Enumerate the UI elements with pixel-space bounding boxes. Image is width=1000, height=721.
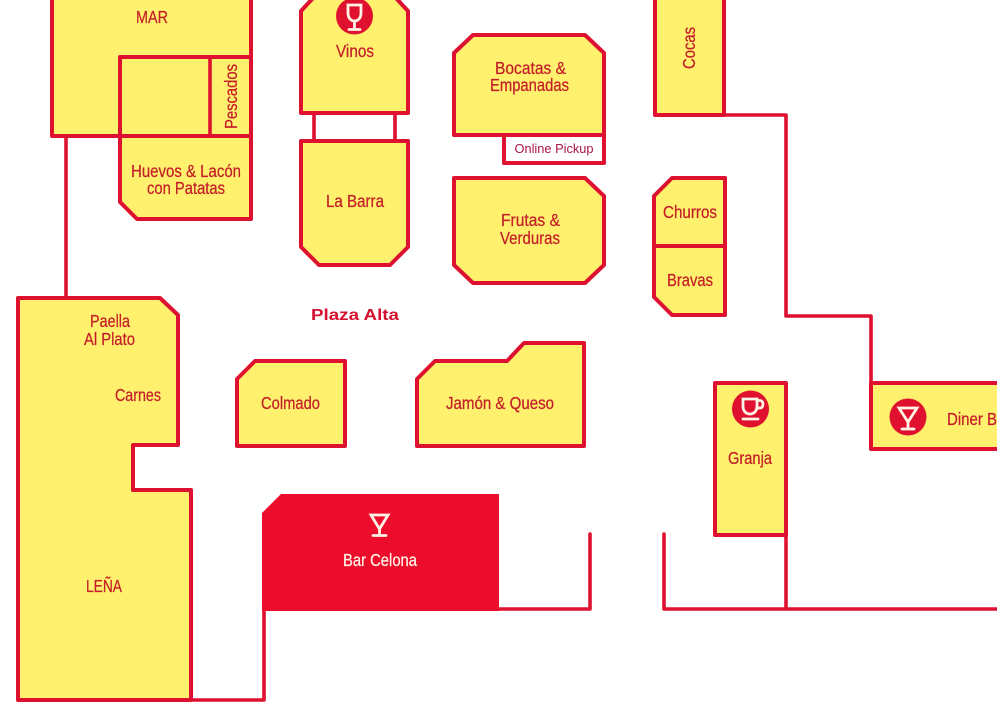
stall: Colmado: Colmado (261, 393, 320, 413)
online pickup box (504, 135, 604, 163)
stall: MAR and Pescados: Pescados (221, 64, 241, 129)
stall: Huevos & Lacón con Patatas: Huevos & Lacón (131, 161, 241, 181)
stall: Frutas & Verduras (454, 178, 604, 283)
stall: Leña, Paella and Carnes: Al Plato (84, 329, 135, 349)
stall: Leña, Paella and Carnes: Carnes (115, 385, 161, 405)
icon: coffee cup (732, 390, 769, 428)
stall: Churros: Churros (663, 202, 717, 222)
stall: Frutas & Verduras: Frutas & (501, 210, 560, 230)
stall: Bocatas & Empanadas (454, 35, 604, 135)
stall: Leña, Paella and Carnes: LEÑA (86, 575, 122, 596)
online pickup box: Online Pickup (514, 141, 594, 156)
stall: Vinos (301, 0, 408, 113)
stall: Leña, Paella and Carnes (18, 298, 191, 700)
stall: Vinos: Vinos (336, 41, 374, 61)
heading: Plaza Alta: Plaza Alta (311, 307, 399, 324)
stall: Colmado (237, 361, 345, 446)
outer walls and corridors (66, 113, 1000, 700)
stall: Granja (715, 383, 786, 535)
stall: Bocatas & Empanadas: Bocatas & (495, 58, 566, 78)
stall: Jamón & Queso (417, 343, 584, 446)
stall: Cocas: Cocas (679, 27, 699, 69)
stall: Bravas: Bravas (667, 270, 713, 290)
stall: Huevos & Lacón con Patatas (120, 136, 251, 219)
icon: cocktail glass in circle (890, 398, 926, 436)
stall: La Barra (301, 141, 408, 265)
stall: Leña, Paella and Carnes: Paella (90, 311, 130, 331)
stall: Bar Celona: Bar Celona (343, 550, 417, 570)
stall: Cocas (655, 0, 724, 115)
stall: MAR and Pescados: MAR (136, 7, 168, 27)
stall: Bravas (654, 246, 725, 315)
stall: Granja: Granja (728, 448, 772, 468)
stall: La Barra: La Barra (326, 191, 384, 211)
icon: wine glass (336, 0, 373, 34)
stall: Diner B (871, 383, 1000, 449)
stall: Jamón & Queso: Jamón & Queso (446, 393, 554, 413)
stall: Bocatas & Empanadas: Empanadas (490, 75, 569, 95)
icon: cocktail glass (371, 515, 388, 536)
stall: Huevos & Lacón con Patatas: con Patatas (147, 178, 225, 198)
stall: Bar Celona (262, 494, 499, 611)
stall: Frutas & Verduras: Verduras (500, 228, 560, 248)
stall: MAR and Pescados (52, 0, 251, 136)
stall: Churros (654, 178, 725, 246)
